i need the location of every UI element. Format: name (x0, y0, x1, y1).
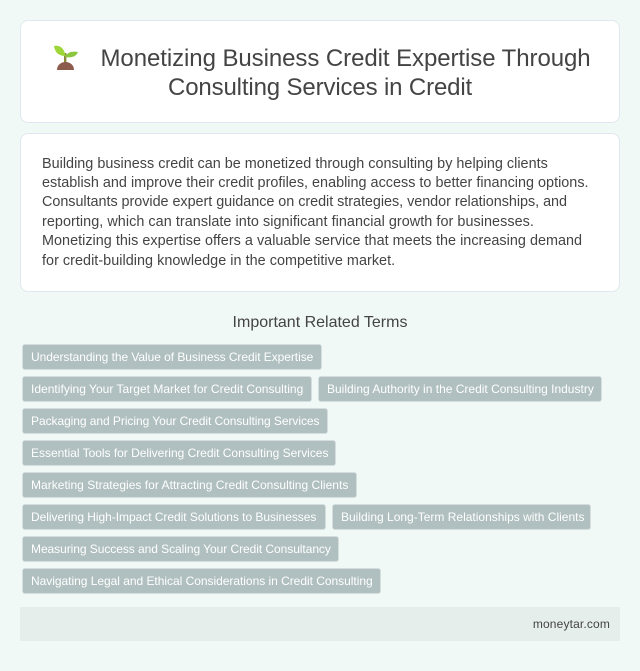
icon: seedling (54, 46, 78, 70)
tag: Marketing Strategies for Attracting Credit Consulting Clients (31, 478, 348, 492)
tag (332, 504, 591, 530)
text block: description: Building business credit can be monetized through consulting by helping clients (42, 156, 548, 172)
tag (22, 472, 357, 498)
tag: Building Authority in the Credit Consulting Industry (327, 382, 594, 396)
tag (22, 568, 381, 594)
panel: description card (20, 133, 620, 292)
tag: Understanding the Value of Business Credit Expertise (31, 350, 313, 364)
tag (22, 408, 328, 434)
heading: related terms: Important Related Terms (233, 314, 407, 331)
tag: Building Long-Term Relationships with Clients (341, 510, 584, 524)
tag (318, 376, 602, 402)
tag (22, 536, 339, 562)
title: Monetizing Business Credit Expertise Through (100, 45, 591, 72)
tag (22, 440, 336, 466)
text block: description (42, 156, 589, 269)
text block: description: establish and improve their credit profiles, enabling access to better financing options. (42, 175, 589, 191)
tag: Navigating Legal and Ethical Considerations in Credit Consulting (31, 574, 373, 588)
tag: Identifying Your Target Market for Credit Consulting (31, 382, 303, 396)
tag: Packaging and Pricing Your Credit Consulting Services (31, 414, 319, 428)
panel: title card (20, 20, 620, 123)
tag (22, 376, 312, 402)
footer: source: moneytar.com (533, 617, 610, 631)
tag (22, 344, 322, 370)
tag (22, 504, 326, 530)
title: Consulting Services in Credit (168, 74, 472, 101)
text block: description: Monetizing this expertise offers a valuable service that meets the increasing demand (42, 233, 582, 249)
text block: description: for credit-building knowledge in the competitive market. (42, 253, 395, 269)
footer bar (20, 607, 620, 641)
title (100, 45, 591, 101)
tag: Essential Tools for Delivering Credit Consulting Services (31, 446, 328, 460)
text block: description: Consultants provide expert guidance on credit strategies, vendor relationships, and (42, 194, 567, 210)
tag: Delivering High-Impact Credit Solutions to Businesses (31, 510, 316, 524)
tag: Measuring Success and Scaling Your Credit Consultancy (31, 542, 331, 556)
text block: description: reporting, which can translate into significant financial growth for businesses. (42, 214, 534, 230)
